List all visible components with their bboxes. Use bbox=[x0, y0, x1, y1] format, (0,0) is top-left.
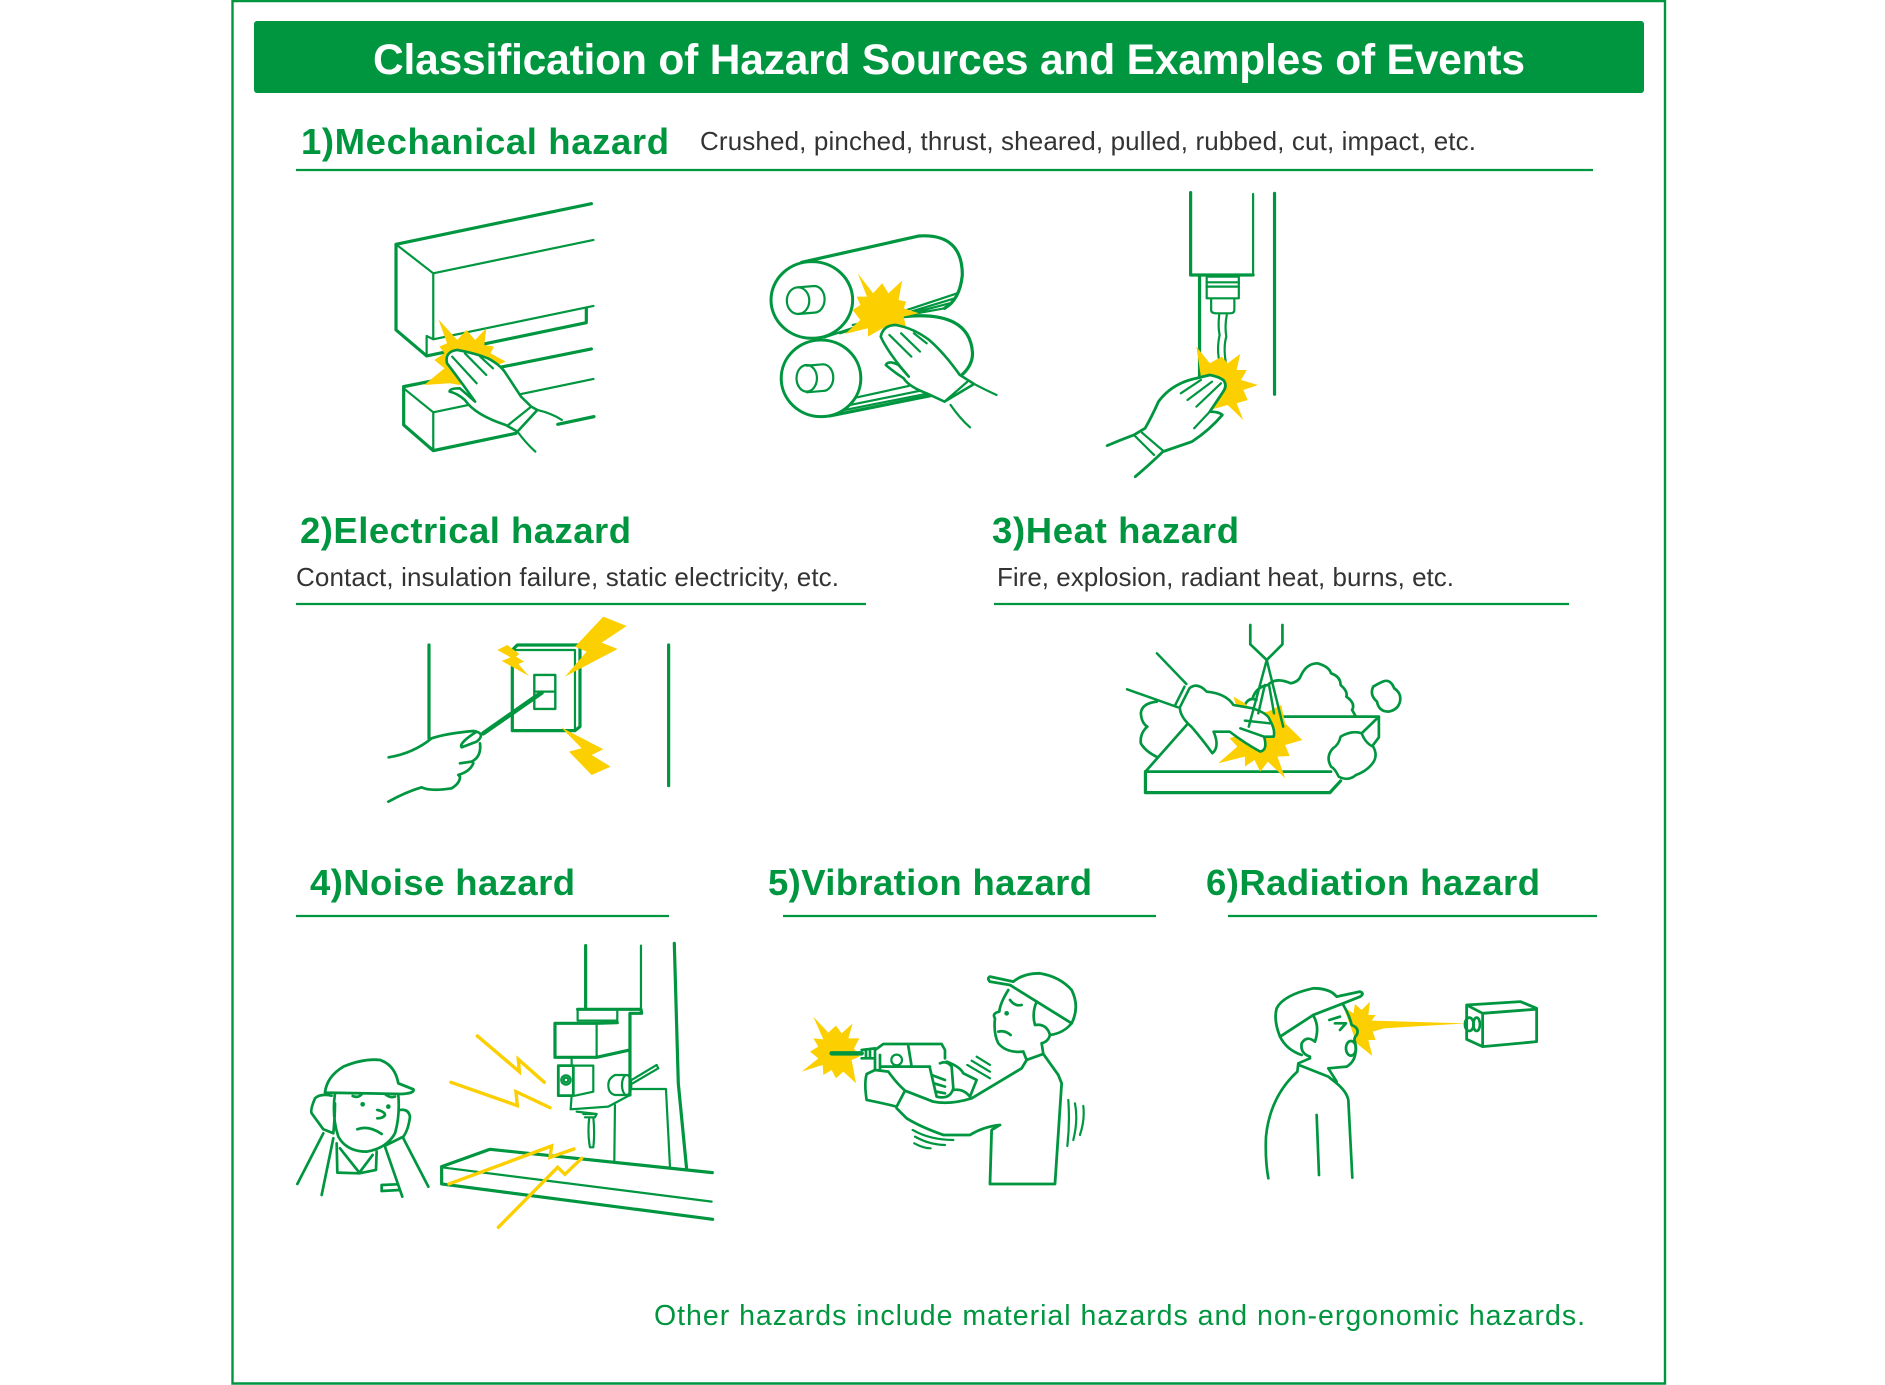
panel: noise hazard bbox=[296, 862, 713, 1227]
description: heat hazard: Fire, explosion, radiant heat, burns, etc. bbox=[997, 562, 1454, 592]
panel: radiation hazard bbox=[1206, 862, 1597, 1178]
footnote: Other hazards include material hazards and non-ergonomic hazards. bbox=[654, 1300, 1585, 1332]
heading: heat hazard: 3)Heat hazard bbox=[992, 510, 1239, 551]
outer frame bbox=[232, 1, 1665, 1384]
illustration: hand touching drill bbox=[1107, 193, 1275, 477]
heading: vibration hazard: 5)Vibration hazard bbox=[768, 862, 1092, 903]
illustration: worker using vibrating power drill bbox=[802, 973, 1084, 1184]
title banner bbox=[254, 21, 1644, 93]
illustration: worker covering ears beside drilling machine bbox=[297, 943, 713, 1227]
heading: noise hazard: 4)Noise hazard bbox=[310, 862, 575, 903]
title banner: Classification of Hazard Sources and Examples of Events bbox=[373, 37, 1525, 84]
illustration: worker eye exposed to radiation beam bbox=[1266, 988, 1537, 1178]
panel: mechanical hazard bbox=[296, 121, 1593, 477]
panel: electrical hazard bbox=[296, 510, 866, 802]
heading: electrical hazard: 2)Electrical hazard bbox=[300, 510, 631, 551]
illustration: hand caught in press bbox=[396, 204, 594, 452]
description: electrical hazard: Contact, insulation failure, static electricity, etc. bbox=[296, 562, 839, 592]
heading: radiation hazard: 6)Radiation hazard bbox=[1206, 862, 1540, 903]
illustration: hand burned by welding torch bbox=[1127, 625, 1400, 793]
illustration: hand caught between rollers bbox=[771, 236, 997, 427]
description: mechanical hazard: Crushed, pinched, thrust, sheared, pulled, rubbed, cut, impact, etc. bbox=[700, 126, 1476, 156]
illustration: screwdriver at electrical switch bbox=[388, 617, 669, 802]
panel: heat hazard bbox=[992, 510, 1569, 793]
panel: vibration hazard bbox=[768, 862, 1156, 1184]
heading: mechanical hazard: 1)Mechanical hazard bbox=[301, 121, 669, 162]
